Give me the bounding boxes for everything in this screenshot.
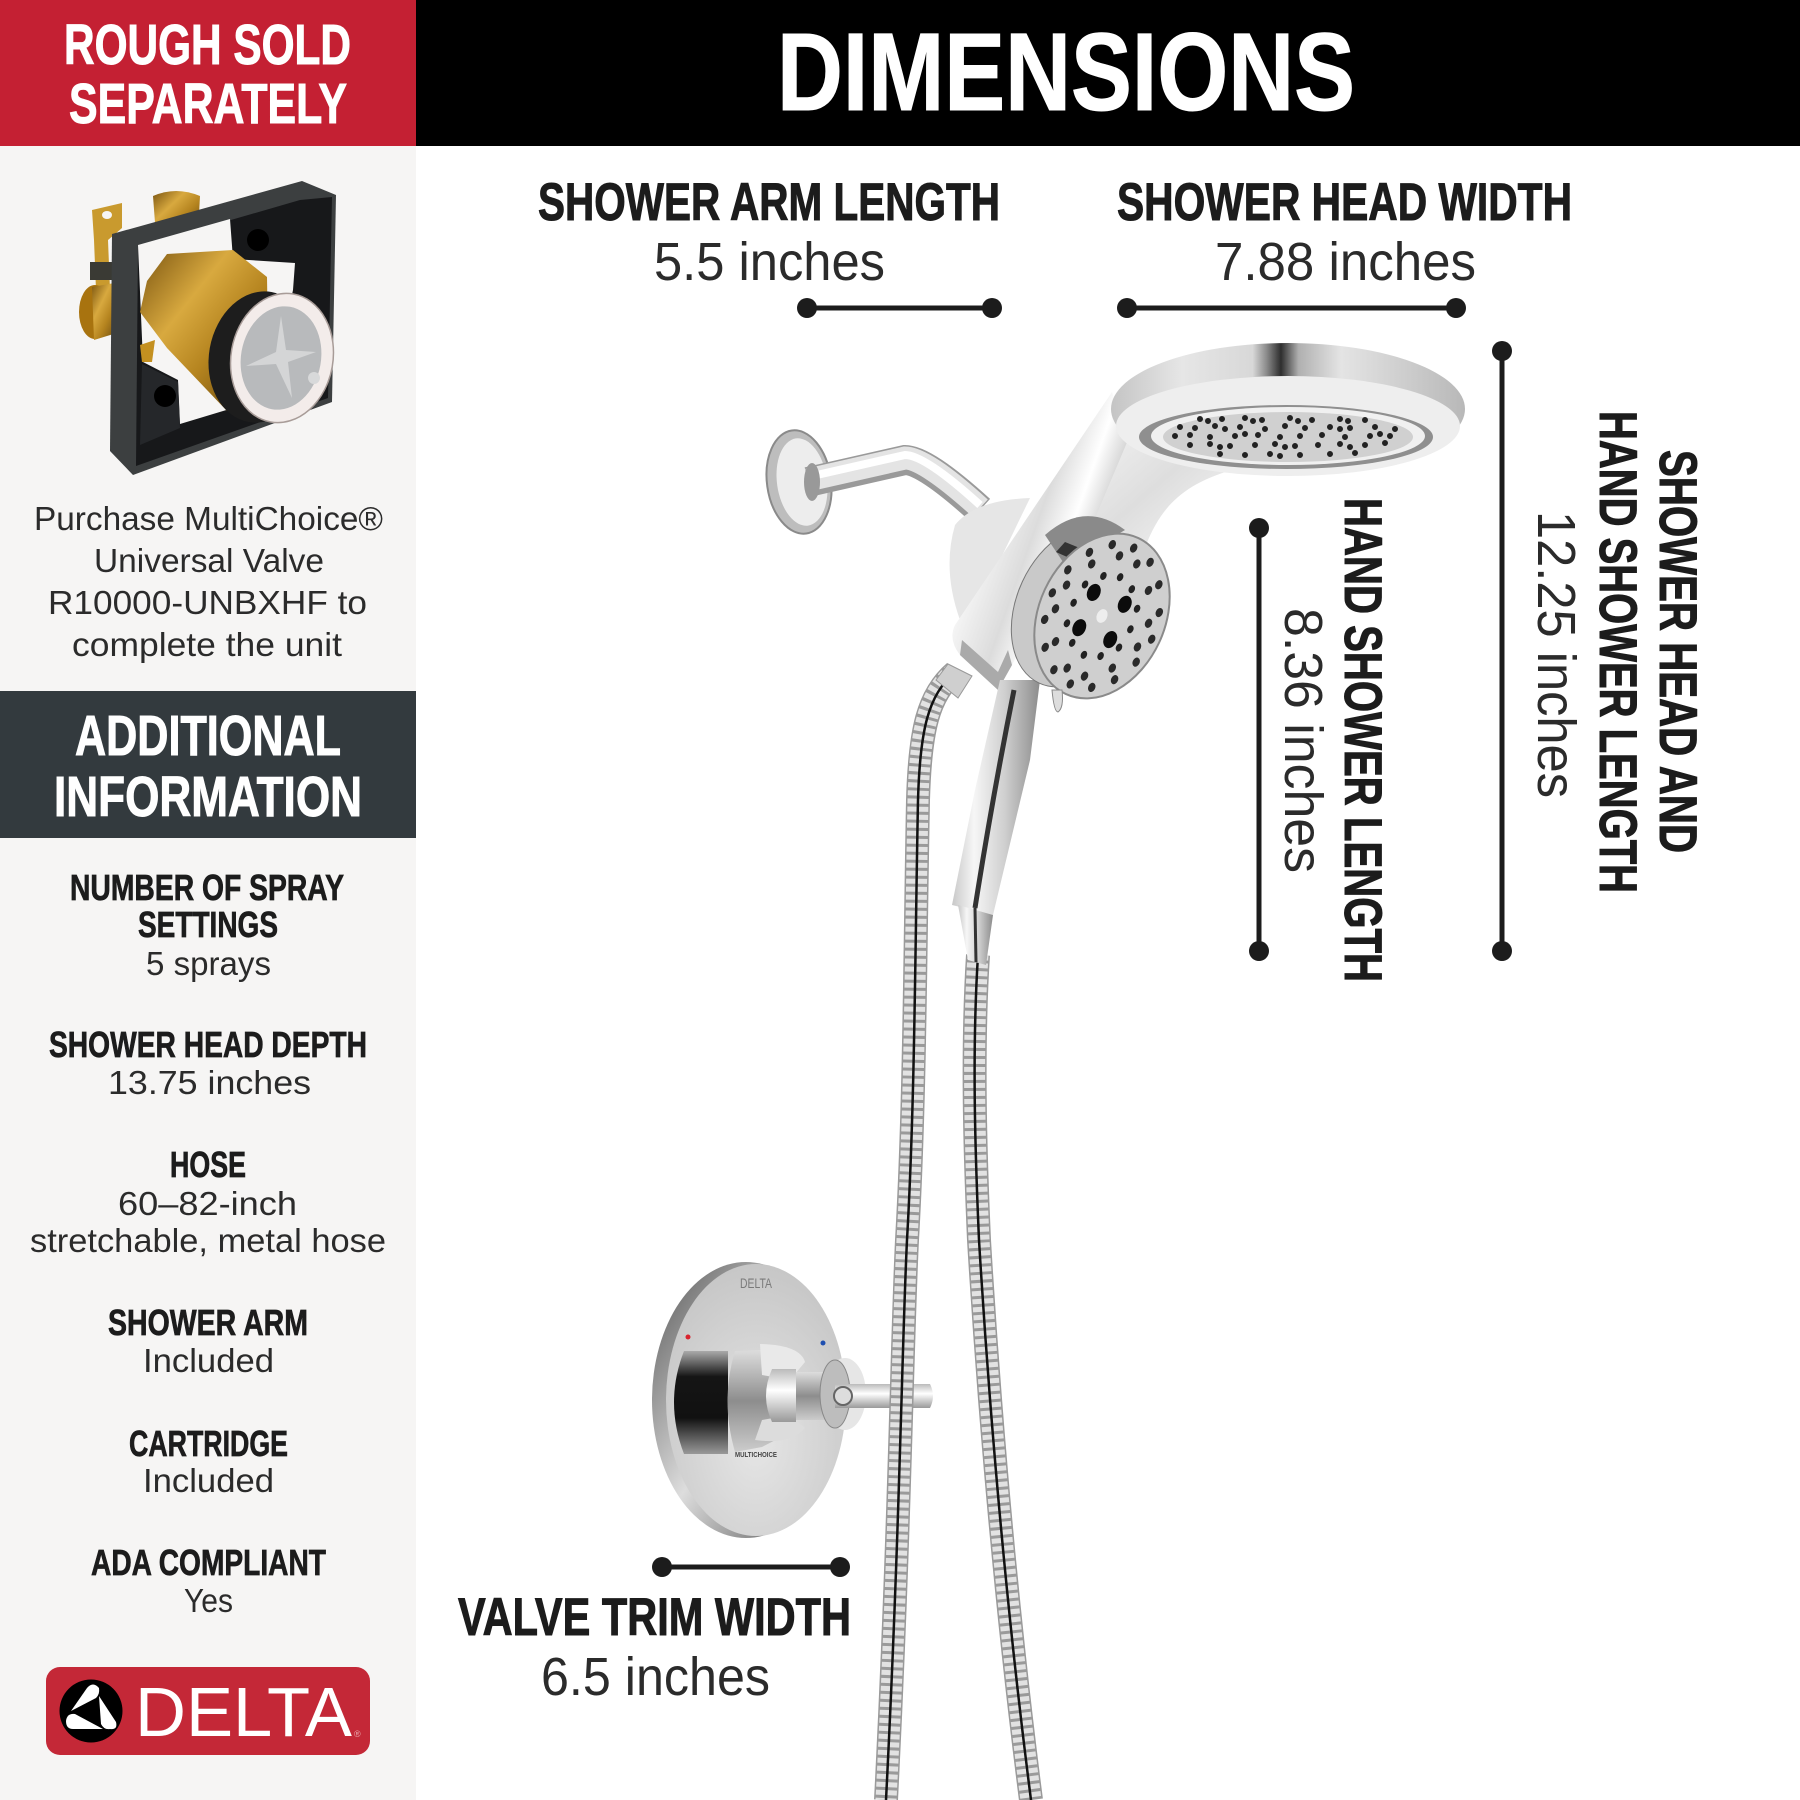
- spec: cartridge: [129, 1423, 288, 1499]
- spec: shower arm: [108, 1302, 308, 1379]
- label: hand shower length: HAND SHOWER LENGTH: [1333, 498, 1392, 982]
- text: purchase note: Universal Valve: [94, 542, 324, 579]
- spec: shower head depth: 13.75 inches: [108, 1064, 311, 1101]
- icon: rough-in valve: [79, 181, 344, 475]
- text: purchase note: [34, 500, 383, 663]
- spec: hose: [30, 1144, 386, 1259]
- label: shower head width: 7.88 inches: [1215, 232, 1476, 292]
- label: valve trim width: VALVE TRIM WIDTH: [458, 1588, 851, 1647]
- icon: hoses: [886, 672, 1031, 1800]
- header: dimensions: DIMENSIONS: [777, 11, 1355, 134]
- label: valve trim width: [458, 1557, 851, 1707]
- label: shower head and hand shower length: HAND SHOWER LENGTH: [1588, 411, 1647, 893]
- spec: cartridge: Included: [143, 1462, 274, 1499]
- label: shower head and hand shower length: 12.25 inches: [1526, 511, 1586, 798]
- spec: ada compliant: ADA COMPLIANT: [91, 1542, 326, 1583]
- holes: rain head spray: [1175, 418, 1395, 456]
- icon: rain shower head: [952, 343, 1465, 690]
- icon: shower arm: [760, 426, 1030, 620]
- banner: rough sold separately: [0, 0, 416, 146]
- label: shower head width: [1117, 173, 1572, 318]
- logo: delta: DELTA: [135, 1673, 352, 1751]
- heading: additional information: [0, 691, 416, 838]
- spec: shower arm: SHOWER ARM: [108, 1302, 308, 1343]
- label: shower head width: SHOWER HEAD WIDTH: [1117, 173, 1572, 232]
- label: valve trim width: 6.5 inches: [541, 1647, 770, 1707]
- spec: ada compliant: Yes: [184, 1582, 233, 1619]
- label: shower arm length: SHOWER ARM LENGTH: [538, 173, 1000, 232]
- label: shower head and hand shower length: [1492, 341, 1707, 961]
- banner: rough sold separately: SEPARATELY: [69, 72, 347, 136]
- icon: hand shower: [936, 504, 1195, 965]
- spec: shower head depth: [49, 1024, 367, 1101]
- header: dimensions: [416, 0, 1800, 146]
- label: shower head and hand shower length: SHOWER HEAD AND: [1648, 450, 1707, 853]
- banner: rough sold separately: ROUGH SOLD: [64, 13, 351, 77]
- icon: valve trim: DELTA: [740, 1275, 772, 1291]
- spec: hose: stretchable, metal hose: [30, 1222, 386, 1259]
- heading: additional information: ADDITIONAL: [75, 704, 341, 768]
- spec: number of spray settings: 5 sprays: [146, 945, 271, 982]
- icon: valve trim: MULTICHOICE: [735, 1452, 777, 1459]
- spec: number of spray settings: [70, 867, 344, 982]
- text: purchase note: complete the unit: [72, 626, 342, 663]
- label: shower arm length: [538, 173, 1002, 318]
- panel: sidebar background: [0, 0, 416, 1800]
- holes: hand shower spray: [1021, 525, 1183, 707]
- label: hand shower length: 8.36 inches: [1273, 608, 1333, 873]
- text: purchase note: R10000-UNBXHF to: [48, 584, 367, 621]
- spec: shower arm: Included: [143, 1342, 274, 1379]
- icon: valve trim: [652, 1262, 933, 1538]
- label: hand shower length: [1249, 498, 1392, 982]
- text: purchase note: Purchase MultiChoice®: [34, 500, 383, 537]
- spec: number of spray settings: NUMBER OF SPRAY: [70, 867, 344, 908]
- spec: cartridge: CARTRIDGE: [129, 1423, 288, 1464]
- logo: delta: [46, 1667, 370, 1755]
- logo: delta: ®: [354, 1729, 361, 1739]
- spec: ada compliant: [91, 1542, 326, 1619]
- heading: additional information: INFORMATION: [54, 765, 362, 829]
- spec: hose: HOSE: [170, 1144, 246, 1185]
- spec: hose: 60–82-inch: [118, 1185, 297, 1222]
- spec: number of spray settings: SETTINGS: [138, 904, 278, 945]
- spec: shower head depth: SHOWER HEAD DEPTH: [49, 1024, 367, 1065]
- label: shower arm length: 5.5 inches: [654, 232, 885, 292]
